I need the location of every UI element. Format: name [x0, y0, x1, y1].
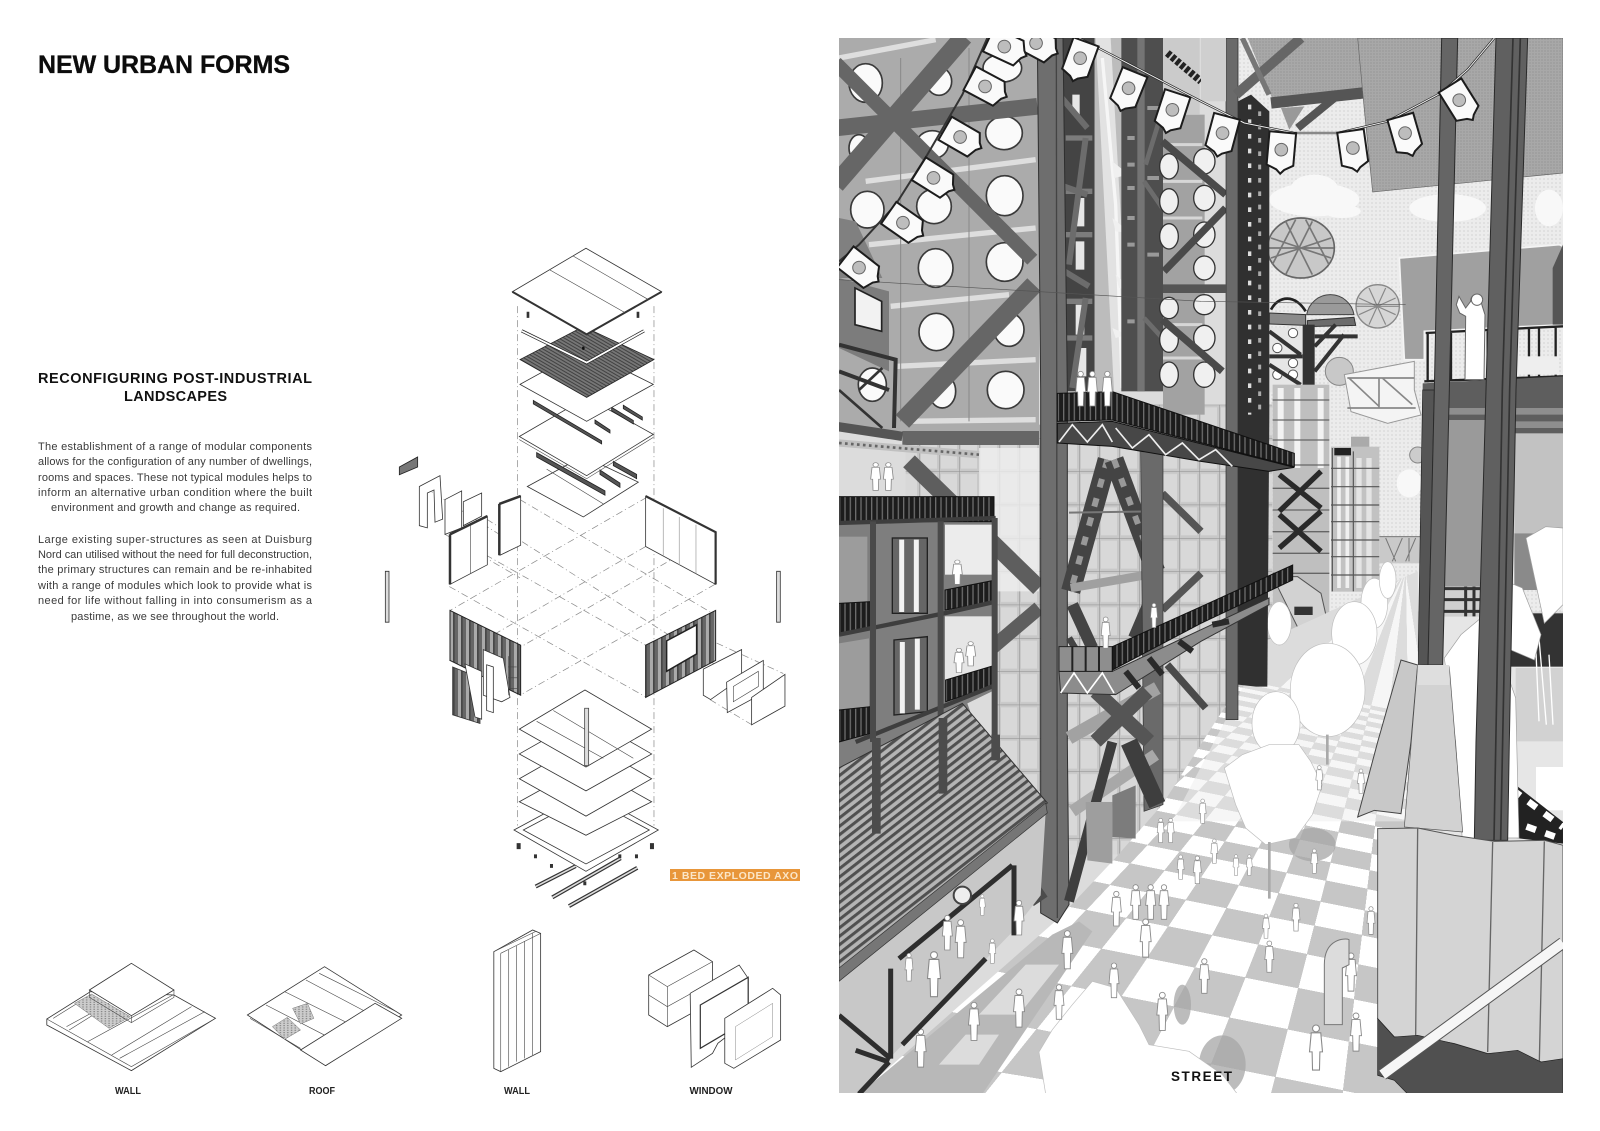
distant tower A [1273, 385, 1329, 630]
overhead canopies [1248, 38, 1563, 192]
tower with stair [1059, 38, 1163, 391]
people on the street [915, 766, 1375, 1070]
paved street with checkerboard [874, 572, 1418, 1093]
heading: reconfiguring post-industrial landscapes [38, 371, 312, 405]
under balcony walls [1423, 376, 1563, 617]
floor layers [514, 690, 658, 906]
construction lines [423, 306, 783, 826]
component: window module [649, 950, 781, 1068]
component labels [115, 1085, 733, 1097]
left block with balconies [839, 463, 996, 785]
roof posts [876, 718, 996, 834]
white plant foliage [1444, 527, 1563, 840]
upper left wall group [399, 457, 521, 584]
text block: super-structures: with a range of modules which look to provide what is [37, 580, 312, 592]
awnings [1358, 660, 1463, 832]
columns [385, 571, 780, 622]
component: wall module [47, 963, 215, 1071]
corrugated shop roof [839, 703, 1047, 971]
sky [1239, 38, 1563, 611]
cross wires [839, 280, 1406, 305]
fence [1379, 537, 1421, 563]
text block: super-structures: Large existing super-structures as seen at Duisburg [38, 534, 312, 546]
white pod [1344, 361, 1421, 423]
white trees [1039, 562, 1396, 1094]
lower bridge [1059, 565, 1293, 695]
exploded axonometric drawing [385, 248, 785, 906]
lower slabs and cross bracing [1016, 688, 1157, 901]
roof layers [512, 248, 662, 517]
component labels: ROOF [309, 1085, 335, 1097]
right rear room [1443, 613, 1563, 850]
component: wall panel [494, 930, 541, 1072]
text block: modular components: allows for the configuration of any number of dwellings, [38, 456, 312, 468]
lower canopy [1399, 245, 1563, 360]
background glazing [906, 405, 1272, 855]
second column lower [1141, 451, 1163, 811]
bunting flags [837, 23, 1483, 293]
second tower columns [1201, 38, 1301, 720]
text block: modular components: rooms and spaces. These not typical modules helps to [38, 472, 312, 484]
street label: STREET [1171, 1069, 1233, 1084]
perspective drawing [806, 23, 1563, 1094]
label: 1 bed exploded axo: 1 BED EXPLODED AXO [672, 870, 798, 882]
heading: reconfiguring post-industrial landscapes: LANDSCAPES [124, 389, 227, 405]
text block: super-structures: need for life without falling in into consumerism as a [38, 595, 313, 607]
panel: street perspective illustration [806, 23, 1563, 1094]
distant tower B [1331, 437, 1379, 592]
geodesic spheres [1268, 218, 1426, 463]
small room at left [839, 218, 896, 428]
lower left wall group [450, 610, 521, 723]
main column [1037, 38, 1069, 923]
distant platform structure [1269, 313, 1358, 392]
text block: super-structures: the primary structures can remain and be re-inhabited [38, 564, 312, 576]
title: NEW URBAN FORMS [38, 51, 290, 79]
building face [839, 38, 1039, 431]
clouds [1269, 175, 1563, 497]
sidewalk light patches [939, 965, 1059, 1065]
corrugated lower awning [1378, 828, 1563, 1062]
tree shadows [1174, 828, 1336, 1094]
halftone sidewalk [859, 921, 1092, 1094]
lower right wall group [646, 610, 785, 725]
awning folds [1416, 829, 1544, 1061]
far pavement haze [1172, 571, 1418, 821]
text block: super-structures [37, 534, 313, 623]
component: roof module [247, 967, 402, 1066]
steel bracing [836, 36, 1039, 665]
text block: modular components: inform an alternative urban condition where the built [38, 487, 312, 499]
upper bridge [1057, 371, 1294, 471]
text block: modular components: The establishment of a range of modular components [38, 441, 312, 453]
second tower panels [1160, 38, 1226, 415]
tree trunks [1269, 735, 1327, 899]
bunting strings [839, 38, 1494, 261]
bridge legs and lower tower [1069, 460, 1206, 708]
awning support pole [1382, 943, 1563, 1075]
support blocks [1086, 785, 1136, 864]
foreground columns [1418, 38, 1528, 840]
text block: modular components [38, 441, 312, 514]
text block: modular components: environment and growth and change as required. [51, 502, 300, 514]
text block: super-structures: Nord can utilised without the need for full deconstruction, [38, 549, 312, 561]
component labels: WINDOW [690, 1085, 733, 1097]
upper right wall [646, 496, 716, 584]
heading: reconfiguring post-industrial landscapes: RECONFIGURING POST-INDUSTRIAL [38, 371, 312, 387]
ribbed duct [1324, 939, 1349, 1025]
shopfront [839, 803, 1047, 1094]
component labels: WALL [115, 1085, 142, 1097]
balcony with person [1424, 245, 1563, 381]
text block: super-structures: pastime, as we see throughout the world. [71, 611, 279, 623]
dark awning underside [1378, 1019, 1563, 1094]
component labels: WALL [504, 1085, 531, 1097]
